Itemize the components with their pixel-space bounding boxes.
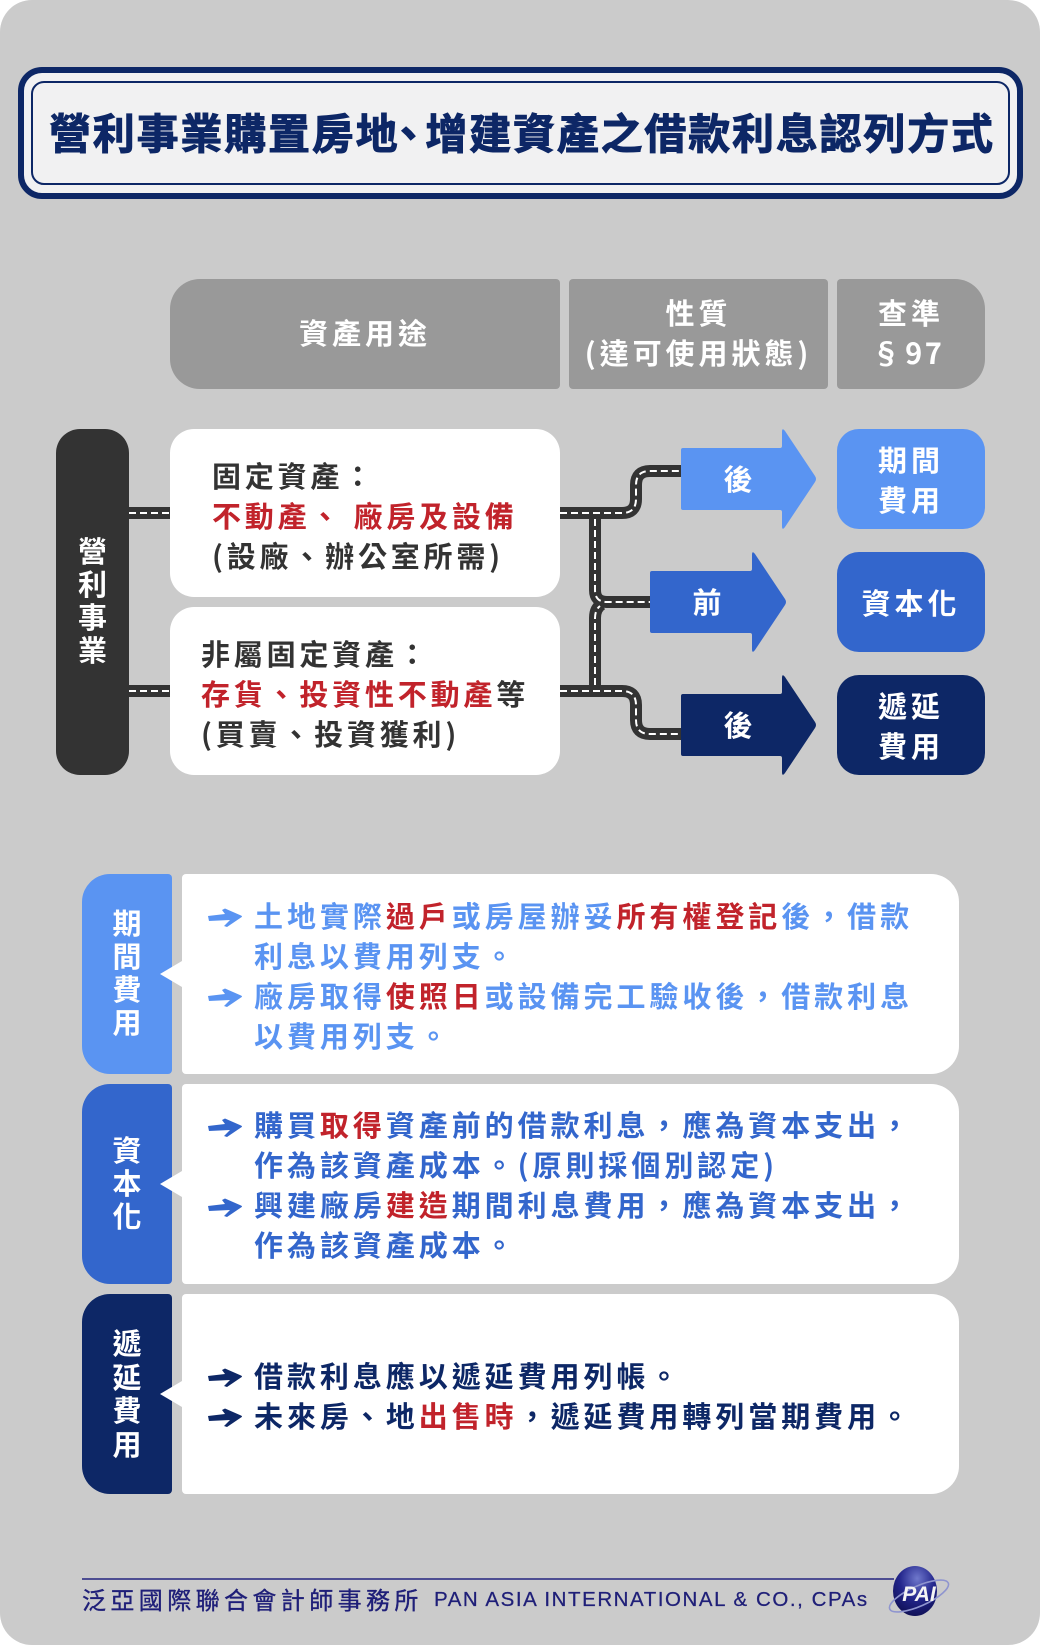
- title text: 營利事業購置房地、增建資產之借款利息認列方式: [49, 101, 995, 162]
- result label: 費用: [878, 478, 944, 520]
- tab: [82, 1084, 172, 1284]
- tab label: 期間費用: [112, 901, 142, 1042]
- header label: 查準: [878, 291, 944, 333]
- panel: period expense details: [82, 874, 959, 1074]
- arrow: after: [681, 675, 816, 775]
- footer: firm name Chinese: 泛亞國際聯合會計師事務所: [82, 1581, 423, 1616]
- text: non-fixed assets: 非屬固定資產：: [201, 632, 431, 674]
- panel: capitalization details: [82, 1084, 959, 1284]
- icon: arrow: [208, 1408, 242, 1427]
- pointer: [160, 1381, 182, 1407]
- icon: arrow: [208, 1118, 242, 1137]
- arrow label: 前: [692, 580, 722, 622]
- text: purpose: (買賣、投資獲利): [201, 712, 460, 754]
- icon: arrow: [208, 908, 242, 927]
- pointer: [160, 1171, 182, 1197]
- result label: 遞延: [878, 684, 944, 726]
- text: point one continued: 利息以費用列支。: [254, 934, 518, 976]
- text: point two continued: 以費用列支。: [254, 1014, 452, 1056]
- icon: arrow: [208, 988, 242, 1007]
- result: period expense: [837, 429, 985, 529]
- tab label: 遞延費用: [112, 1321, 142, 1464]
- title frame: [18, 67, 1023, 199]
- header: asset use: [170, 279, 560, 389]
- result label: 資本化: [862, 581, 960, 623]
- icon: arrow: [208, 1198, 242, 1217]
- body card: [182, 1294, 959, 1494]
- panel: deferred expense details: [82, 1294, 959, 1494]
- entity bar label: 營利事業: [78, 529, 107, 670]
- text: point one continued: 作為該資產成本。(原則採個別認定): [254, 1143, 778, 1185]
- result: deferred expense: [837, 675, 985, 775]
- text: fixed assets: 固定資產：: [212, 454, 376, 496]
- footer rule: [82, 1578, 894, 1580]
- text: inventory, investment property: 存貨、投資性不動產等: [201, 672, 529, 714]
- text: point one: 土地實際過戶或房屋辦妥所有權登記後，借款: [254, 894, 913, 936]
- header sublabel: § 97: [872, 331, 944, 373]
- text: purpose: (設廠、辦公室所需): [212, 534, 504, 576]
- result label: 費用: [878, 724, 944, 766]
- footer: firm name English: PAN ASIA INTERNATIONAL & CO., CPAs: [434, 1588, 869, 1611]
- body card: [182, 1084, 959, 1284]
- result: capitalized: [837, 552, 985, 652]
- text: point one: 借款利息應以遞延費用列帳。: [254, 1354, 682, 1396]
- arrow: after: [681, 429, 816, 529]
- text: point two: 廠房取得使照日或設備完工驗收後，借款利息: [254, 974, 913, 1016]
- arrow: before: [650, 552, 786, 652]
- header label: 性質: [666, 291, 731, 333]
- header: article 97: [837, 279, 985, 389]
- header sublabel: (達可使用狀態): [585, 331, 812, 373]
- text: point two: 興建廠房建造期間利息費用，應為資本支出，: [254, 1183, 913, 1225]
- pointer: [160, 961, 182, 987]
- body card: [182, 874, 959, 1074]
- panel: non-fixed assets: [170, 607, 560, 775]
- text: point two: 未來房、地出售時，遞延費用轉列當期費用。: [254, 1394, 913, 1436]
- text: real estate, plant and equipment: 不動產、 廠房及設備: [212, 494, 518, 536]
- logo: globe: PAI: [902, 1583, 937, 1606]
- header: nature: [569, 279, 828, 389]
- tab label: 資本化: [112, 1128, 142, 1236]
- title inner border: [31, 81, 1010, 185]
- arrow label: 後: [723, 703, 752, 745]
- arrow label: 後: [723, 457, 752, 499]
- text: point one: 購買取得資產前的借款利息，應為資本支出，: [254, 1103, 913, 1145]
- text: point two continued: 作為該資產成本。: [254, 1223, 518, 1265]
- tab: [82, 874, 172, 1074]
- panel: fixed assets: [170, 429, 560, 597]
- entity bar: [56, 429, 129, 775]
- logo: globe: [888, 1566, 950, 1616]
- tab: [82, 1294, 172, 1494]
- result label: 期間: [878, 438, 944, 480]
- header label: 資產用途: [299, 311, 431, 353]
- icon: arrow: [208, 1368, 242, 1387]
